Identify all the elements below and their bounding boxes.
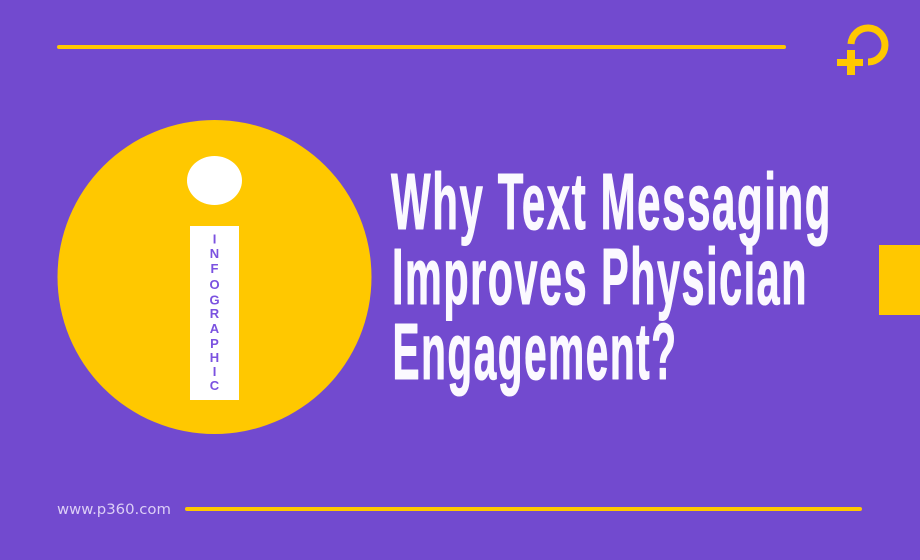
icon: dot of the i [187,156,242,205]
vertical label: infographic: I [213,232,216,246]
vertical label: infographic: A [210,321,220,336]
vertical label: infographic: N [210,246,219,261]
website url: www.p360.com [57,502,171,518]
vertical label: infographic: G [209,292,220,308]
vertical label: infographic: F [211,261,219,276]
vertical label: infographic: C [210,378,220,393]
vertical label: infographic: P [210,336,219,351]
bottom yellow rule [185,507,862,511]
title [391,157,832,396]
stem of the i [190,226,239,400]
right edge yellow block [879,245,920,315]
icon: p360 logo [837,28,885,75]
vertical label: infographic: I [213,364,216,379]
vertical label: infographic: R [210,306,220,321]
icon: information circle [58,120,372,434]
vertical label: infographic: H [210,350,219,365]
top yellow rule [57,45,786,49]
vertical label: infographic: O [209,277,220,292]
